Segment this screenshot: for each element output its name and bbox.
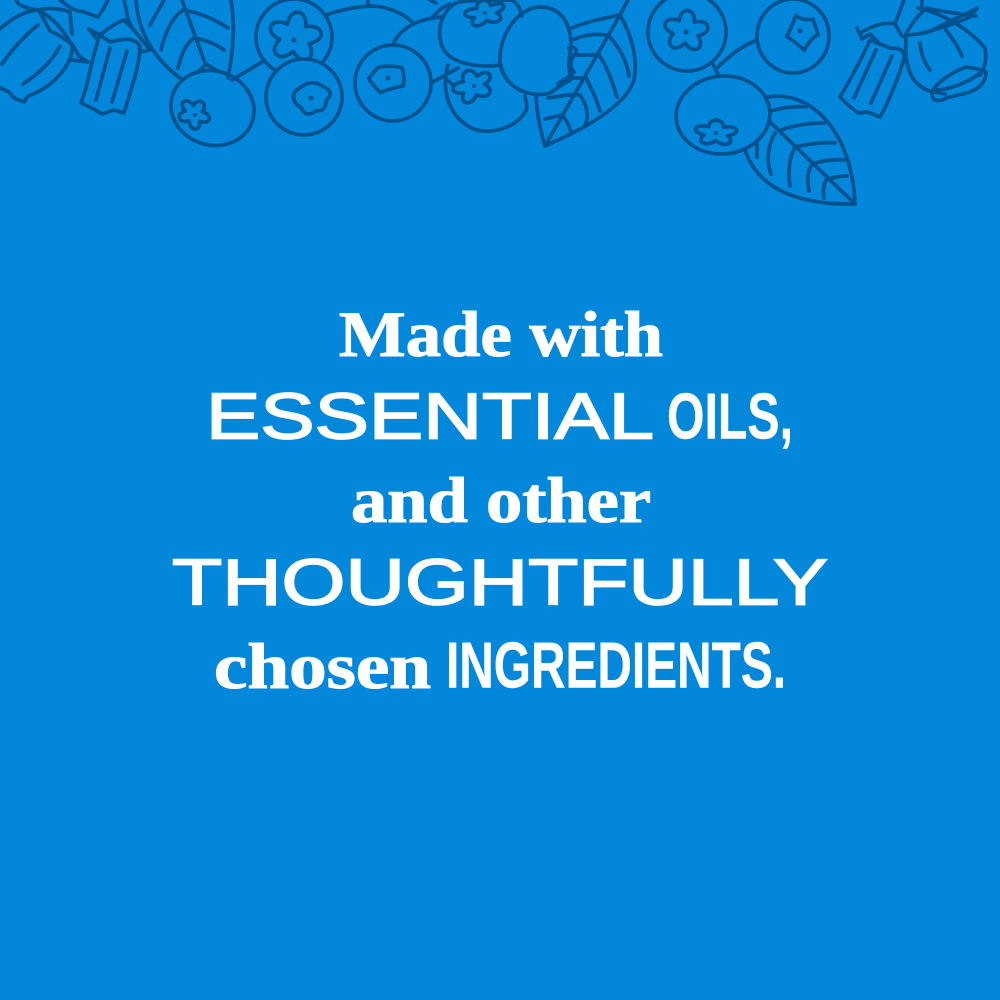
line: chosen: chosen [214, 631, 431, 703]
line: and other: and other [351, 465, 651, 537]
line: OILS,: OILS, [667, 380, 793, 452]
icon: centre leaf [536, 0, 635, 146]
line: THOUGHTFULLY: THOUGHTFULLY [172, 546, 828, 618]
line: ESSENTIAL: ESSENTIAL [206, 380, 654, 452]
icon: centre berry cluster [355, 0, 571, 131]
text block: headline [172, 299, 828, 703]
icon: second bud [81, 0, 150, 114]
icon: right berries and stem [648, 0, 829, 77]
line: Made with: Made with [339, 299, 663, 371]
icon: right buds [840, 0, 986, 117]
icon: berry top pair [256, 0, 412, 135]
line: INGREDIENTS.: INGREDIENTS. [446, 628, 786, 702]
icon: top-left leaf [136, 0, 233, 78]
icon: right leaf [673, 72, 855, 204]
illustration: blueberries and leaves border [0, 0, 986, 204]
icon: left hanging bud [0, 0, 108, 102]
icon: berry with side calyx [161, 60, 264, 156]
